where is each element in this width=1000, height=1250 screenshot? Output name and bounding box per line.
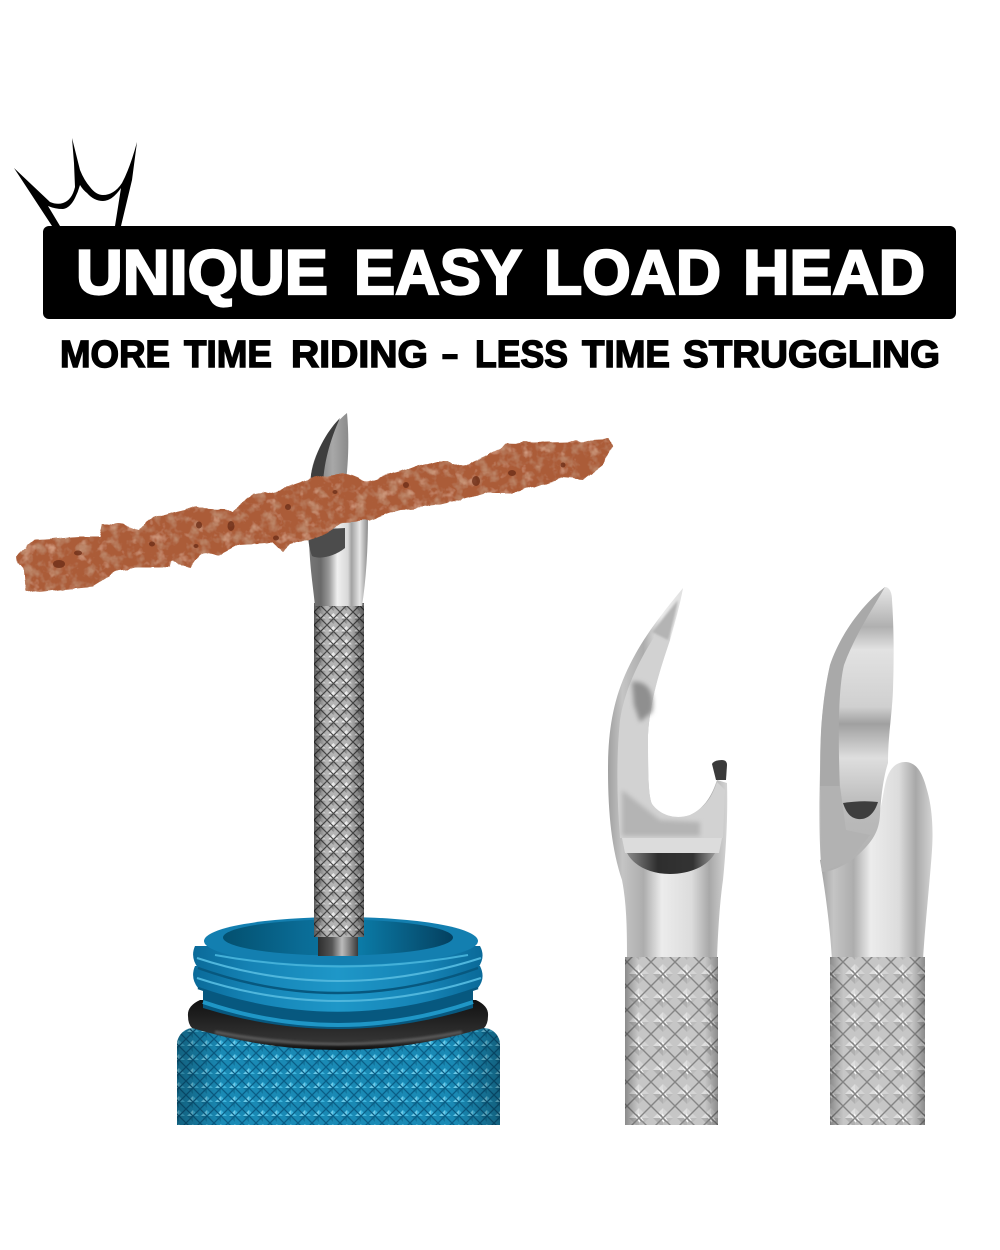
left hook metal [608, 588, 727, 960]
centre tool [308, 413, 368, 956]
knurled shaft [314, 603, 364, 937]
right lower shaft [820, 762, 933, 960]
left hook dark crescent [627, 853, 715, 874]
title: LOAD [544, 238, 721, 308]
left hook nub [712, 760, 727, 780]
tool lower stub [318, 934, 358, 956]
subtitle [60, 334, 940, 376]
right hook detail [819, 587, 933, 1125]
left hook blade face [617, 612, 725, 838]
left hook scuff [632, 682, 653, 722]
title banner [43, 226, 956, 319]
o-ring [188, 1000, 488, 1050]
subtitle: TIME [184, 334, 272, 376]
dark collar [308, 528, 345, 558]
left knurl [625, 957, 718, 1125]
right notch shadow [843, 801, 878, 819]
left hook detail [608, 588, 727, 1125]
smooth neck [309, 515, 368, 606]
title: UNIQUE [76, 238, 328, 308]
subtitle: TIME [582, 334, 670, 376]
subtitle: – [442, 334, 458, 376]
left hook bright band [622, 838, 722, 853]
left hook blade tip shade [652, 600, 678, 640]
right knurl [830, 957, 925, 1125]
icon: crown logo [14, 138, 137, 226]
subtitle: LESS [475, 334, 568, 376]
blue tool body [177, 917, 500, 1125]
plug pits [53, 462, 566, 568]
repair plug strip [16, 439, 612, 593]
top rim [204, 917, 478, 965]
right lump shadow [820, 786, 870, 872]
right blade [819, 587, 894, 872]
subtitle: MORE [60, 334, 170, 376]
subtitle: STRUGGLING [683, 334, 940, 376]
threads [193, 946, 483, 1029]
title: HEAD [743, 238, 925, 308]
blade [309, 413, 348, 520]
title: EASY [354, 238, 522, 308]
title [76, 238, 925, 308]
knurled body [177, 1028, 500, 1125]
rim highlight [215, 955, 468, 966]
bore [223, 920, 453, 956]
right blade edge [820, 587, 885, 790]
subtitle: RIDING [291, 334, 428, 376]
